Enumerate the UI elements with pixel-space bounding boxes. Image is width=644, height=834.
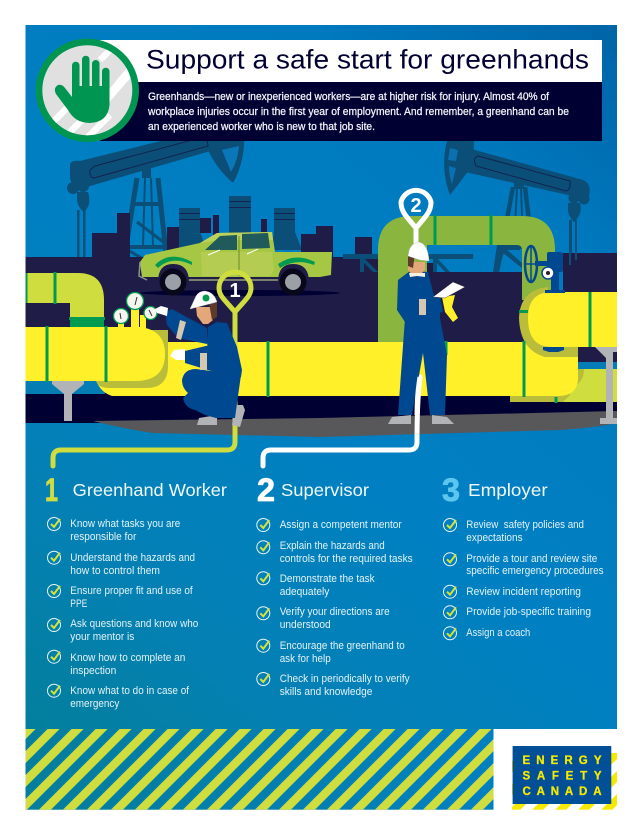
icon: stop hand bbox=[36, 34, 142, 145]
blue strip under pipe bbox=[26, 393, 105, 394]
list: worker items: responsible for bbox=[70, 531, 137, 543]
logo: energy safety canada: CANADA bbox=[522, 786, 602, 798]
pump jack beam slot right bbox=[474, 156, 570, 191]
left support bbox=[52, 381, 84, 421]
ground bbox=[93, 411, 617, 437]
intro panel: workplace injuries occur in the first year of employment. And remember, a greenhand can be bbox=[147, 106, 569, 118]
bench structures bbox=[343, 220, 577, 272]
list: employer items: Assign a coach bbox=[466, 627, 530, 639]
icons: worker checks bbox=[48, 518, 60, 697]
number 2: 2 bbox=[257, 472, 275, 508]
poster background bbox=[26, 25, 617, 729]
list: supervisor items: ask for help bbox=[280, 653, 331, 665]
worker 2 bbox=[388, 242, 465, 424]
list: worker items: Ask questions and know who bbox=[70, 618, 198, 630]
green arch pipe bbox=[378, 216, 555, 345]
illustration: oil field scene bbox=[25, 130, 617, 466]
list: supervisor items: Encourage the greenhand to bbox=[280, 640, 405, 652]
list: worker items: Understand the hazards and bbox=[70, 552, 195, 564]
logo: energy safety canada: SAFETY bbox=[522, 770, 602, 782]
number 1: 1 bbox=[45, 472, 58, 508]
list: supervisor items: controls for the required tasks bbox=[280, 553, 413, 565]
list: supervisor items: skills and knowledge bbox=[280, 686, 372, 698]
title banner: Support a safe start for greenhands bbox=[146, 44, 589, 74]
pin and path 2 bbox=[263, 190, 431, 466]
list: supervisor items bbox=[280, 519, 413, 698]
intro panel: Greenhands—new or inexperienced workers—are at higher risk for injury. Almost 40% of bbox=[148, 91, 550, 103]
logo: energy safety canada: ENERGY bbox=[522, 755, 602, 767]
pump jack right bbox=[444, 141, 590, 272]
list: worker items: how to control them bbox=[70, 565, 160, 577]
pipe shadows bbox=[96, 330, 168, 388]
pump jack left bbox=[67, 141, 244, 257]
pin and path 1: 1 bbox=[229, 280, 241, 302]
lime pipe right bbox=[563, 369, 617, 402]
valve bbox=[525, 246, 565, 352]
list: employer items: specific emergency procedures bbox=[466, 565, 604, 577]
list: employer items: Review safety policies and bbox=[466, 519, 584, 531]
column: greenhand worker bbox=[45, 472, 227, 710]
heading: supervisor: Supervisor bbox=[281, 480, 369, 500]
list: worker items: Know what to do in case of bbox=[70, 685, 190, 697]
list: supervisor items: Explain the hazards and bbox=[280, 540, 385, 552]
column: supervisor bbox=[257, 472, 413, 698]
worker 1 bbox=[155, 291, 245, 427]
gauges bbox=[114, 292, 157, 328]
navy band bbox=[25, 393, 617, 423]
icons: employer checks bbox=[444, 518, 456, 640]
right support bbox=[595, 347, 617, 424]
lime flange bbox=[69, 317, 105, 327]
list: worker items bbox=[70, 518, 198, 710]
list: worker items: inspection bbox=[70, 665, 116, 677]
title banner bbox=[100, 40, 602, 82]
list: employer items: Provide job-specific training bbox=[466, 606, 591, 618]
heading: employer: Employer bbox=[468, 480, 548, 500]
elbow shadow lower right bbox=[510, 369, 584, 402]
list: employer items bbox=[466, 519, 604, 639]
list: supervisor items: Demonstrate the task bbox=[280, 573, 375, 585]
pump jack beam slot left bbox=[90, 138, 208, 178]
lime pipe left bbox=[25, 273, 104, 320]
pipe bands bbox=[26, 215, 590, 403]
list: worker items: PPE bbox=[70, 598, 87, 610]
yellow pipe upper right bbox=[528, 292, 617, 347]
list: supervisor items: Verify your directions are bbox=[280, 606, 390, 618]
logo: energy safety canada bbox=[512, 746, 617, 810]
column: employer bbox=[442, 472, 604, 640]
intro panel: an experienced worker who is new to that job site. bbox=[148, 121, 375, 133]
yellow pipe front bbox=[25, 327, 165, 381]
refinery stacks bbox=[171, 196, 302, 250]
list: worker items: Know what tasks you are bbox=[70, 518, 180, 530]
pin and path 1 bbox=[53, 272, 251, 466]
list: worker items: your mentor is bbox=[70, 631, 135, 643]
heading: greenhand worker: Greenhand Worker bbox=[73, 480, 227, 500]
list: worker items: Know how to complete an bbox=[70, 652, 185, 664]
list: employer items: Provide a tour and review site bbox=[466, 553, 597, 565]
skyline buildings bbox=[25, 213, 617, 362]
intro panel bbox=[100, 82, 602, 141]
list: employer items: Review incident reporting bbox=[466, 586, 581, 598]
list: supervisor items: adequately bbox=[280, 586, 330, 598]
list: supervisor items: Assign a competent mentor bbox=[280, 519, 402, 531]
footer hazard stripes bbox=[26, 729, 494, 810]
list: supervisor items: understood bbox=[280, 619, 331, 631]
pin and path 2: 2 bbox=[410, 195, 422, 217]
icons: supervisor checks bbox=[257, 518, 270, 686]
list: worker items: Ensure proper fit and use of bbox=[70, 585, 193, 597]
list: supervisor items: Check in periodically to verify bbox=[280, 673, 410, 685]
truck bbox=[139, 232, 340, 296]
list: employer items: expectations bbox=[466, 532, 523, 544]
list: worker items: emergency bbox=[70, 698, 120, 710]
header hero bbox=[36, 34, 602, 145]
number 3: 3 bbox=[442, 472, 460, 508]
yellow pipe long bbox=[96, 342, 578, 396]
